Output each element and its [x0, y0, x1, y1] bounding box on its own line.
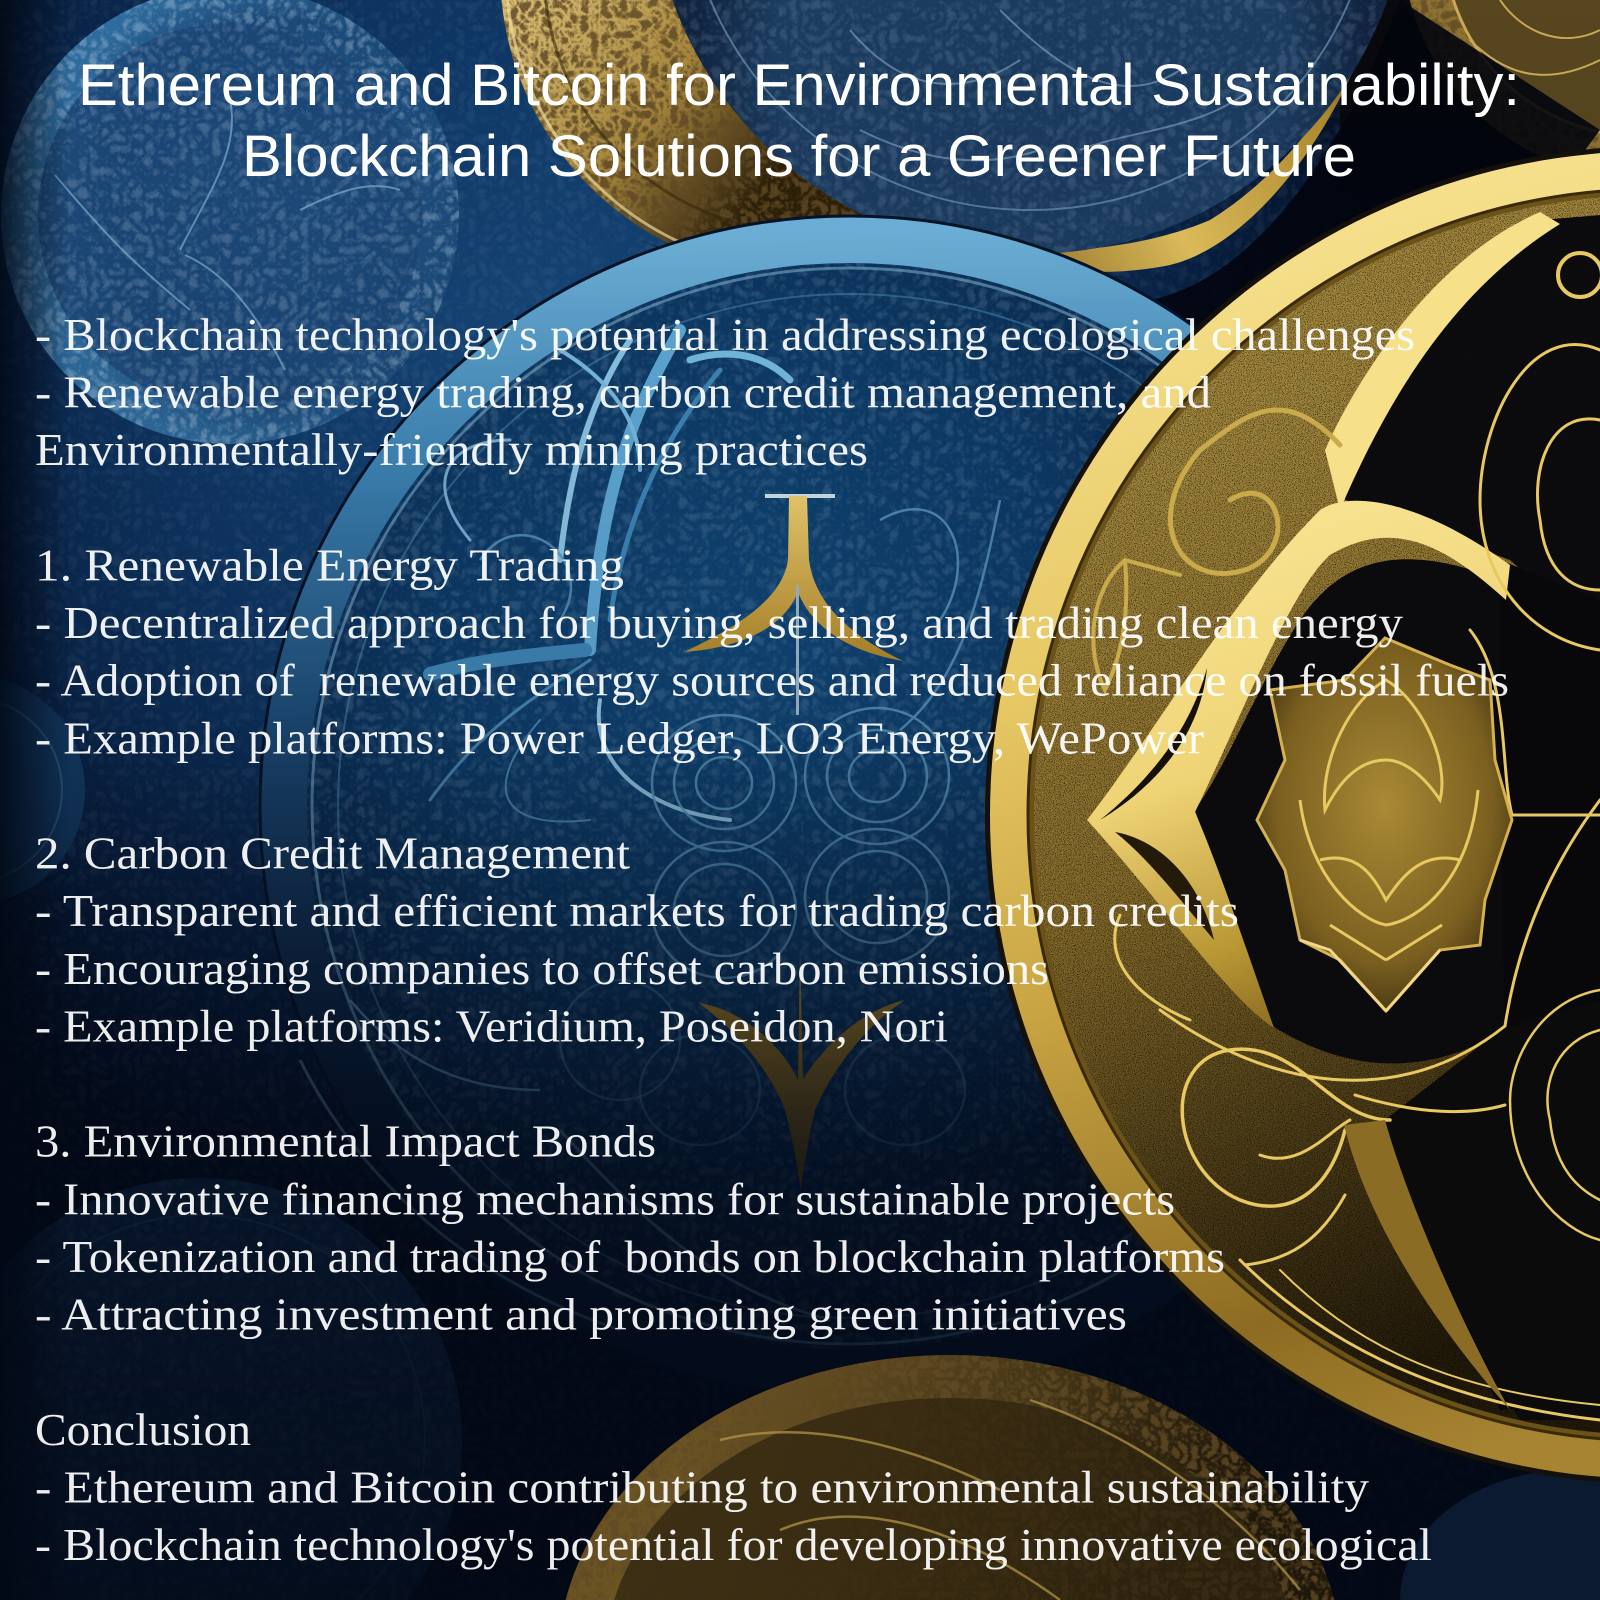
title: [78, 53, 1520, 189]
text block: introduction: - Blockchain technology's potential in addressing ecological challenges: [35, 310, 1415, 360]
text block: carbon credit management: - Example platforms: Veridium, Poseidon, Nori: [35, 1001, 948, 1051]
coin: bottom right dim: [1400, 1470, 1600, 1600]
coin: top left blue: [1, 0, 459, 444]
panel: black field upper: [1344, 215, 1600, 600]
text block: environmental impact bonds: [35, 1117, 1225, 1340]
text block: environmental impact bonds: - Tokenization and trading of bonds on blockchain platforms: [35, 1232, 1225, 1282]
scrollwork: gold lines on coin: [1093, 253, 1600, 1420]
text block: renewable energy trading: - Adoption of renewable energy sources and reduced reliance on fossil fuels: [35, 656, 1509, 706]
scrollwork: light blue feathers: [430, 330, 790, 822]
icon: gold Y top: [684, 494, 903, 715]
band: dark gold lower sweep: [1344, 1120, 1510, 1410]
text block: introduction: [35, 310, 1415, 475]
text block: environmental impact bonds: 3. Environmental Impact Bonds: [35, 1117, 656, 1167]
panel: black field right: [1385, 560, 1600, 1410]
text block: conclusion: Conclusion: [35, 1405, 251, 1455]
scrollwork: concentric circles: [350, 500, 1000, 1145]
text block: renewable energy trading: [35, 540, 1509, 763]
coin: top right gold: [1340, 0, 1600, 190]
coin: top centre dark blue: [650, 0, 1410, 254]
text block: conclusion: - Blockchain technology's potential for developing innovative ecological: [35, 1520, 1432, 1570]
text block: introduction: Environmentally-friendly mining practices: [35, 425, 868, 475]
icon: shield emblem: [1257, 638, 1512, 1011]
coin: bottom gold: [558, 1355, 1342, 1600]
text block: conclusion: [35, 1405, 1432, 1570]
title: Ethereum and Bitcoin for Environmental Sustainability:: [78, 53, 1520, 118]
text block: carbon credit management: - Transparent and efficient markets for trading carbon credits: [35, 886, 1239, 936]
arcs: lower left light lines: [300, 1060, 830, 1330]
overlay: left edge darkening: [0, 0, 70, 1600]
coin: left edge blue: [0, 675, 85, 905]
title: Blockchain Solutions for a Greener Future: [242, 124, 1356, 189]
coin: central blue: [260, 216, 1440, 1396]
band: bright upper sweep: [1325, 212, 1560, 510]
text block: renewable energy trading: - Example platforms: Power Ledger, LO3 Energy, WePower: [35, 713, 1204, 763]
panel: glitter field: [1028, 189, 1600, 1441]
text block: carbon credit management: 2. Carbon Credit Management: [35, 829, 631, 879]
text block: environmental impact bonds: - Attracting investment and promoting green initiatives: [35, 1290, 1127, 1340]
shadow beneath top coins: [640, 0, 1600, 500]
icon: gold Y bottom: [699, 948, 905, 1191]
coin: bottom left dim blue: [0, 1178, 462, 1600]
text block: conclusion: - Ethereum and Bitcoin contributing to environmental sustainability: [35, 1462, 1370, 1512]
panel: black field centre: [1196, 559, 1504, 1064]
panel: black field lower: [1385, 1000, 1600, 1420]
chevron: bright gold: [1087, 501, 1510, 1028]
text block: renewable energy trading: 1. Renewable Energy Trading: [35, 540, 624, 590]
coin: top gold: [500, 0, 1112, 276]
crescent: gold rim of dark coin: [985, 12, 1375, 272]
text block: renewable energy trading: - Decentralized approach for buying, selling, and trading clean energy: [35, 598, 1404, 648]
text block: introduction: - Renewable energy trading, carbon credit management, and: [35, 368, 1211, 418]
coin: big gold: [985, 146, 1600, 1484]
text block: environmental impact bonds: - Innovative financing mechanisms for sustainable projects: [35, 1174, 1175, 1224]
text block: carbon credit management: [35, 829, 1239, 1051]
text block: carbon credit management: - Encouraging companies to offset carbon emissions: [35, 944, 1049, 994]
